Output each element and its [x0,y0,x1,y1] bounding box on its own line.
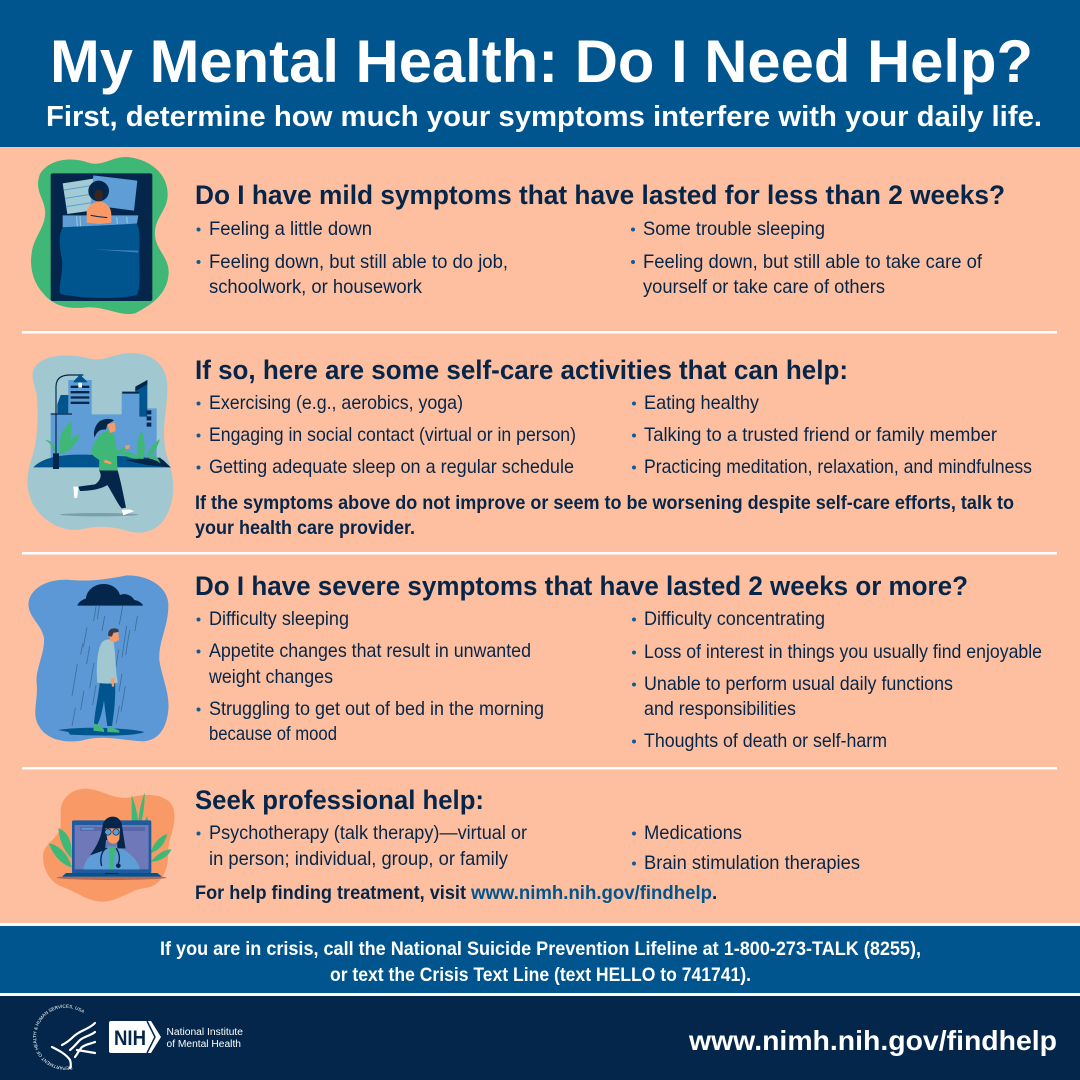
logo: HHS seal: DEPARTMENT OF HEALTH & HUMAN SERVICES, USA [32,1004,84,1070]
heading: mild symptoms: Do I have mild symptoms that have lasted for less than 2 weeks? [195,180,1005,210]
list: severe symptoms left: Difficulty sleeping [209,608,349,630]
logo: NIH [109,1021,161,1053]
list: severe symptoms left: Appetite changes that result in unwanted [209,640,531,662]
footer URL: www.nimh.nih.gov/findhelp [688,1025,1057,1056]
logo: NIH: NIH [114,1027,146,1050]
list: mild symptoms right [631,218,983,298]
list: mild symptoms right: Feeling down, but still able to take care of [643,251,983,273]
header banner [0,0,1080,147]
crisis banner: or text the Crisis Text Line (text HELLO to 741741). [330,965,751,986]
list: severe symptoms right: Loss of interest in things you usually find enjoyable [644,641,1042,663]
list: treatments right [632,822,860,874]
list: self-care right: Eating healthy [644,392,759,414]
text: National Institute of Mental Health: of Mental Health [166,1039,241,1050]
footer [0,996,1080,1080]
note: talk to health care provider: your health care provider. [195,518,415,539]
list: self-care left: Getting adequate sleep on a regular schedule [209,456,574,478]
list: severe symptoms left: Struggling to get out of bed in the morning [209,698,544,720]
list: severe symptoms right [632,608,1042,752]
note: help finding treatment link: www.nimh.nih.gov/findhelp [470,883,712,904]
crisis banner: If you are in crisis, call the National Suicide Prevention Lifeline at 1-800-273-TALK (8255), [160,939,921,960]
icon: doctor on laptop video call [43,789,175,902]
note: help finding treatment link: . [712,883,717,904]
icon: person sleeping in bed [31,157,169,314]
subtitle: First, determine how much your symptoms interfere with your daily life. [46,101,1042,133]
list: treatments right: Medications [644,822,742,844]
list: self-care left: Engaging in social contact (virtual or in person) [209,424,576,446]
icon: woman jogging in city [27,353,173,533]
list: treatments right: Brain stimulation therapies [644,852,860,874]
text: National Institute of Mental Health [166,1027,243,1050]
list: treatments left: in person; individual, group, or family [209,848,508,870]
list: self-care right: Talking to a trusted friend or family member [644,424,997,446]
list: mild symptoms left: Feeling down, but still able to do job, [209,251,508,273]
list: treatments left [196,822,527,870]
list: mild symptoms right: yourself or take care of others [643,276,885,298]
note: talk to health care provider [195,493,1014,539]
icon: man walking in rain [28,575,169,741]
heading: self-care activities: If so, here are some self-care activities that can help: [195,355,848,385]
list: mild symptoms left [196,218,508,298]
list: severe symptoms right: and responsibilities [644,698,796,720]
list: severe symptoms right: Unable to perform usual daily functions [644,673,953,695]
title: My Mental Health: Do I Need Help? [50,28,1033,95]
list: treatments left: Psychotherapy (talk therapy)—virtual or [209,822,527,844]
list: mild symptoms left: Feeling a little down [209,218,372,240]
note: help finding treatment link: For help finding treatment, visit [195,883,467,904]
list: severe symptoms left [196,608,544,745]
list: mild symptoms left: schoolwork, or housework [209,276,422,298]
list: self-care right: Practicing meditation, relaxation, and mindfulness [644,456,1032,478]
list: self-care left [196,392,576,478]
heading: seek professional help: Seek professional help: [195,785,484,815]
heading: severe symptoms: Do I have severe symptoms that have lasted 2 weeks or more? [195,571,968,601]
list: severe symptoms left: because of mood [209,723,337,745]
list: mild symptoms right: Some trouble sleeping [643,218,825,240]
list: self-care left: Exercising (e.g., aerobics, yoga) [209,392,463,414]
note: talk to health care provider: If the symptoms above do not improve or seem to be worsening despite self-care efforts, talk to [195,493,1014,514]
list: severe symptoms right: Difficulty concentrating [644,608,825,630]
list: severe symptoms right: Thoughts of death or self-harm [644,730,887,752]
list: severe symptoms left: weight changes [208,666,333,688]
note: help finding treatment link [195,883,717,904]
crisis banner [0,923,1080,996]
list: self-care right [632,392,1032,478]
text: National Institute of Mental Health: National Institute [166,1027,243,1038]
